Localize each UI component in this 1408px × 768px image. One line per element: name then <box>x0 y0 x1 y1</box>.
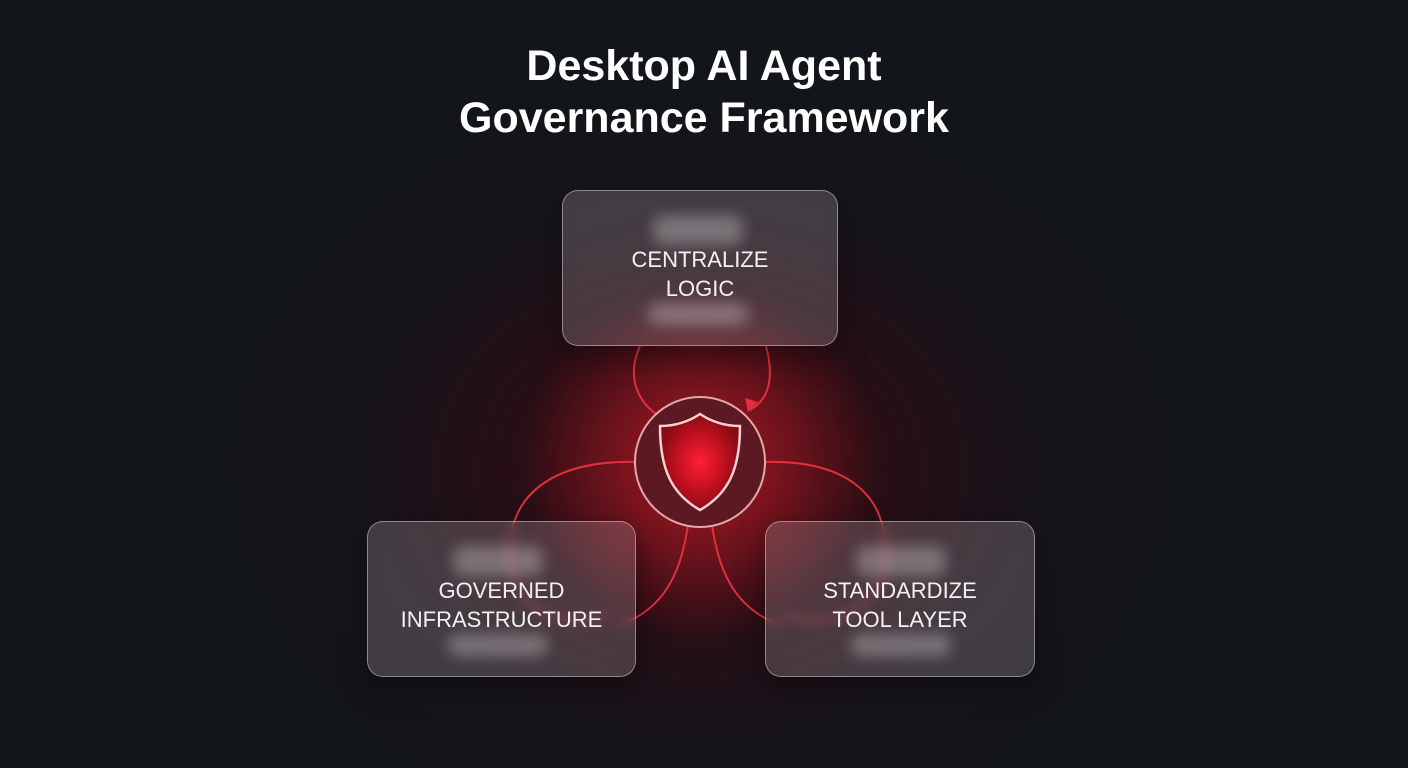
panel: governed infrastructure <box>367 521 636 677</box>
panel: standardize tool layer <box>765 521 1035 677</box>
panel: centralize logic: LOGIC <box>666 276 734 301</box>
panel: centralize logic: CENTRALIZE <box>632 247 768 272</box>
title: Desktop AI Agent <box>526 42 882 90</box>
title <box>459 42 949 142</box>
panel: standardize tool layer: STANDARDIZE <box>823 578 977 603</box>
title: Governance Framework <box>459 94 949 142</box>
panel: governed infrastructure: GOVERNED <box>439 578 564 603</box>
panel: standardize tool layer: TOOL LAYER <box>832 607 968 632</box>
panel: centralize logic <box>562 190 838 346</box>
panel: governed infrastructure: INFRASTRUCTURE <box>401 607 602 632</box>
